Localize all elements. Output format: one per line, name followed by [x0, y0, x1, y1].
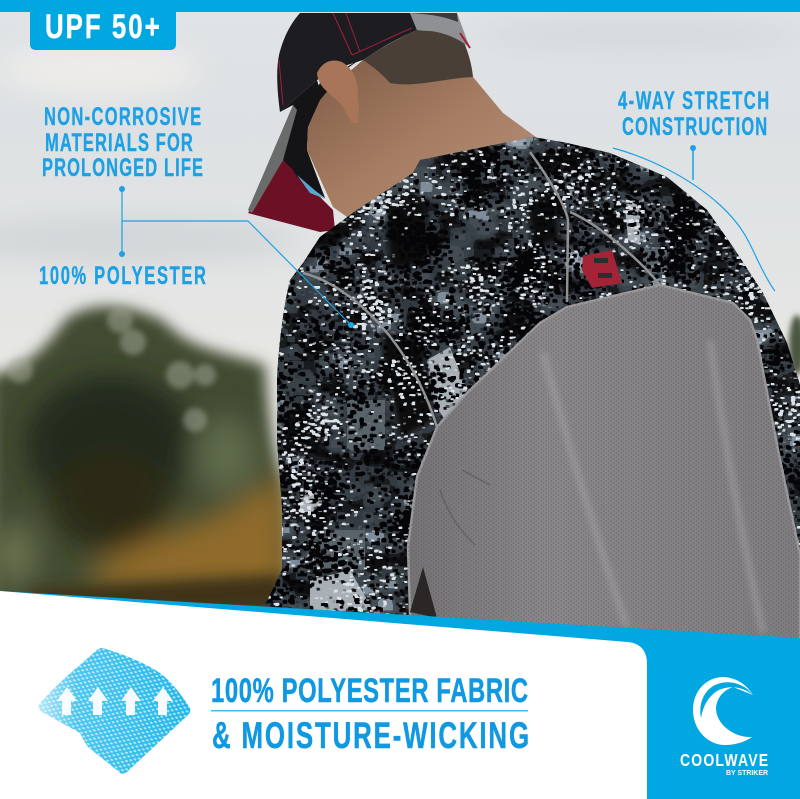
shaded area under cap — [280, 80, 325, 198]
heading: fabric and moisture-wicking: & MOISTURE-WICKING — [212, 714, 529, 756]
callout connector lines — [119, 186, 354, 328]
sunglasses — [287, 58, 362, 198]
camo light and dark blocks — [300, 200, 640, 612]
callout: non-corrosive materials: MATERIALS FOR — [45, 130, 193, 157]
callout: 4-way stretch: CONSTRUCTION — [622, 114, 767, 141]
logo: Coolwave by Striker: BY STRIKER — [726, 770, 768, 777]
badge: UPF 50+: UPF 50+ — [45, 9, 160, 46]
cap brim — [248, 160, 335, 232]
ear — [317, 60, 359, 123]
white footer panel — [0, 591, 647, 799]
callout: 100% polyester: 100% POLYESTER — [39, 263, 206, 290]
blurred tree mass — [0, 306, 285, 610]
callout: non-corrosive materials: PROLONGED LIFE — [42, 155, 203, 182]
top bar — [0, 0, 800, 12]
man: head, neck and cap — [248, 13, 540, 232]
neck and head skin — [307, 60, 540, 217]
cap crown — [277, 13, 417, 112]
heading: fabric and moisture-wicking: 100% POLYESTER FABRIC — [211, 672, 528, 710]
cap strap — [410, 13, 470, 48]
logo: Coolwave by Striker — [680, 677, 768, 777]
heading: fabric and moisture-wicking — [211, 672, 529, 756]
hair — [363, 30, 473, 84]
icon: breathable fabric — [38, 648, 190, 774]
callout: 4-way stretch — [618, 88, 769, 141]
shirt: camouflage raglan and sleeve — [260, 130, 800, 640]
shadow under arm — [410, 567, 437, 618]
seams — [303, 152, 660, 427]
stretch arrow curve — [613, 145, 775, 291]
logo: Coolwave by Striker: COOLWAVE — [680, 750, 768, 770]
shoulder logo — [582, 250, 622, 288]
blue footer band — [0, 591, 800, 799]
callout: non-corrosive materials: NON-CORROSIVE — [44, 104, 201, 131]
callout: non-corrosive materials — [42, 104, 203, 182]
callout: 4-way stretch: 4-WAY STRETCH — [618, 88, 769, 115]
mesh back panel — [408, 285, 800, 640]
